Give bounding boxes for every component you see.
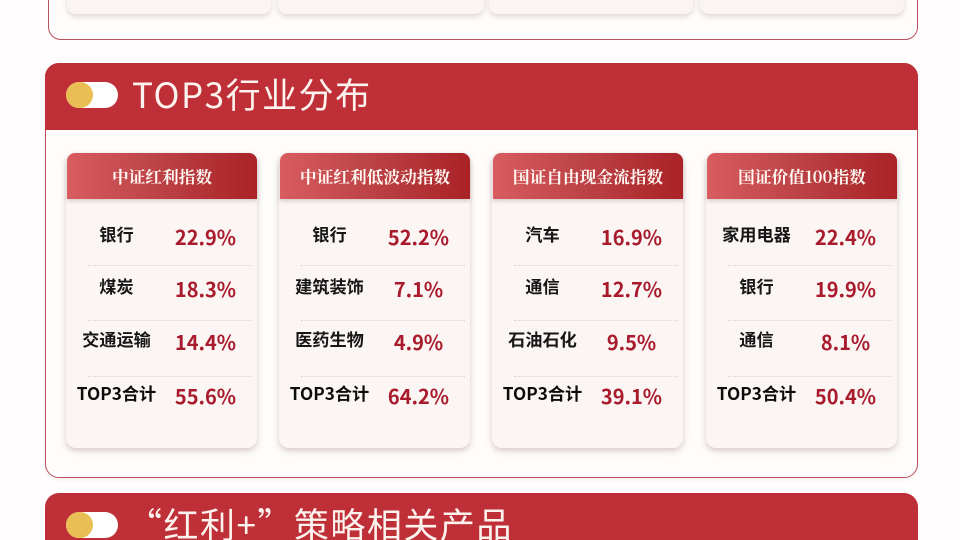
card: CSI Dividend Low Volatility Index: 医药生物 xyxy=(295,326,364,351)
card header: 中证红利指数 xyxy=(112,164,212,188)
card: CNI Value 100 Index: 22.4% xyxy=(815,222,876,251)
card: CSI Dividend Index: 交通运输 xyxy=(82,326,151,351)
card header xyxy=(707,153,897,199)
card: CSI Dividend Low Volatility Index: 52.2% xyxy=(388,222,449,251)
card: CSI Dividend Low Volatility Index: 4.9% xyxy=(394,327,443,356)
card: CSI Dividend Index: 银行 xyxy=(99,221,134,246)
card: CNI Value 100 Index: 银行 xyxy=(739,273,774,298)
card: CNI Value 100 Index: TOP3合计 xyxy=(717,380,796,405)
card: CNI Value 100 Index: 通信 xyxy=(739,326,774,351)
card: CNI Free Cash Flow Index: 9.5% xyxy=(607,327,656,356)
card: CSI Dividend Index: 煤炭 xyxy=(99,273,134,298)
card: CSI Dividend Index: TOP3合计 xyxy=(77,380,156,405)
card: CNI Value 100 Index: 50.4% xyxy=(815,381,876,410)
card: CNI Value 100 Index xyxy=(706,153,897,448)
icon: toggle xyxy=(66,512,118,538)
card: CSI Dividend Low Volatility Index xyxy=(279,153,470,448)
panel: previous section (cropped) xyxy=(48,0,918,40)
card: CSI Dividend Index: 14.4% xyxy=(175,327,236,356)
card: CSI Dividend Low Volatility Index: 64.2% xyxy=(388,381,449,410)
card: CNI Value 100 Index: 家用电器 xyxy=(722,221,791,246)
card: CSI Dividend Low Volatility Index: 7.1% xyxy=(394,274,443,303)
card: CNI Free Cash Flow Index: 通信 xyxy=(525,273,560,298)
card header: 国证价值100指数 xyxy=(738,164,866,188)
card header: 中证红利低波动指数 xyxy=(300,164,450,188)
card: CNI Free Cash Flow Index: 汽车 xyxy=(525,221,560,246)
previous section card 1 xyxy=(67,0,271,14)
previous section card 4 xyxy=(700,0,904,14)
card: CSI Dividend Low Volatility Index: 建筑装饰 xyxy=(295,273,364,298)
card: CNI Free Cash Flow Index: TOP3合计 xyxy=(503,380,582,405)
card: CNI Free Cash Flow Index xyxy=(492,153,683,448)
card: CNI Free Cash Flow Index: 12.7% xyxy=(601,274,662,303)
card header: 国证自由现金流指数 xyxy=(513,164,663,188)
heading: TOP3 industry distribution: TOP3行业分布 xyxy=(132,68,372,119)
card: CSI Dividend Index: 18.3% xyxy=(175,274,236,303)
card: CNI Free Cash Flow Index: 石油石化 xyxy=(508,326,577,351)
card: CSI Dividend Low Volatility Index: 银行 xyxy=(312,221,347,246)
card header xyxy=(493,153,683,199)
previous section card 2 xyxy=(278,0,484,14)
card: CNI Value 100 Index: 8.1% xyxy=(821,327,870,356)
previous section card 3 xyxy=(489,0,693,14)
panel: TOP3 industry distribution xyxy=(45,63,918,478)
card: CSI Dividend Index: 55.6% xyxy=(175,381,236,410)
icon: toggle xyxy=(66,82,118,108)
card: CSI Dividend Low Volatility Index: TOP3合计 xyxy=(290,380,369,405)
card header xyxy=(67,153,257,199)
section header bar: TOP3 xyxy=(45,63,918,130)
card: CNI Value 100 Index: 19.9% xyxy=(815,274,876,303)
card: CNI Free Cash Flow Index: 16.9% xyxy=(601,222,662,251)
card header xyxy=(280,153,470,199)
card: CSI Dividend Index xyxy=(66,153,257,448)
card: CSI Dividend Index: 22.9% xyxy=(175,222,236,251)
card: CNI Free Cash Flow Index: 39.1% xyxy=(601,381,662,410)
section header bar: dividend plus products xyxy=(45,493,918,540)
